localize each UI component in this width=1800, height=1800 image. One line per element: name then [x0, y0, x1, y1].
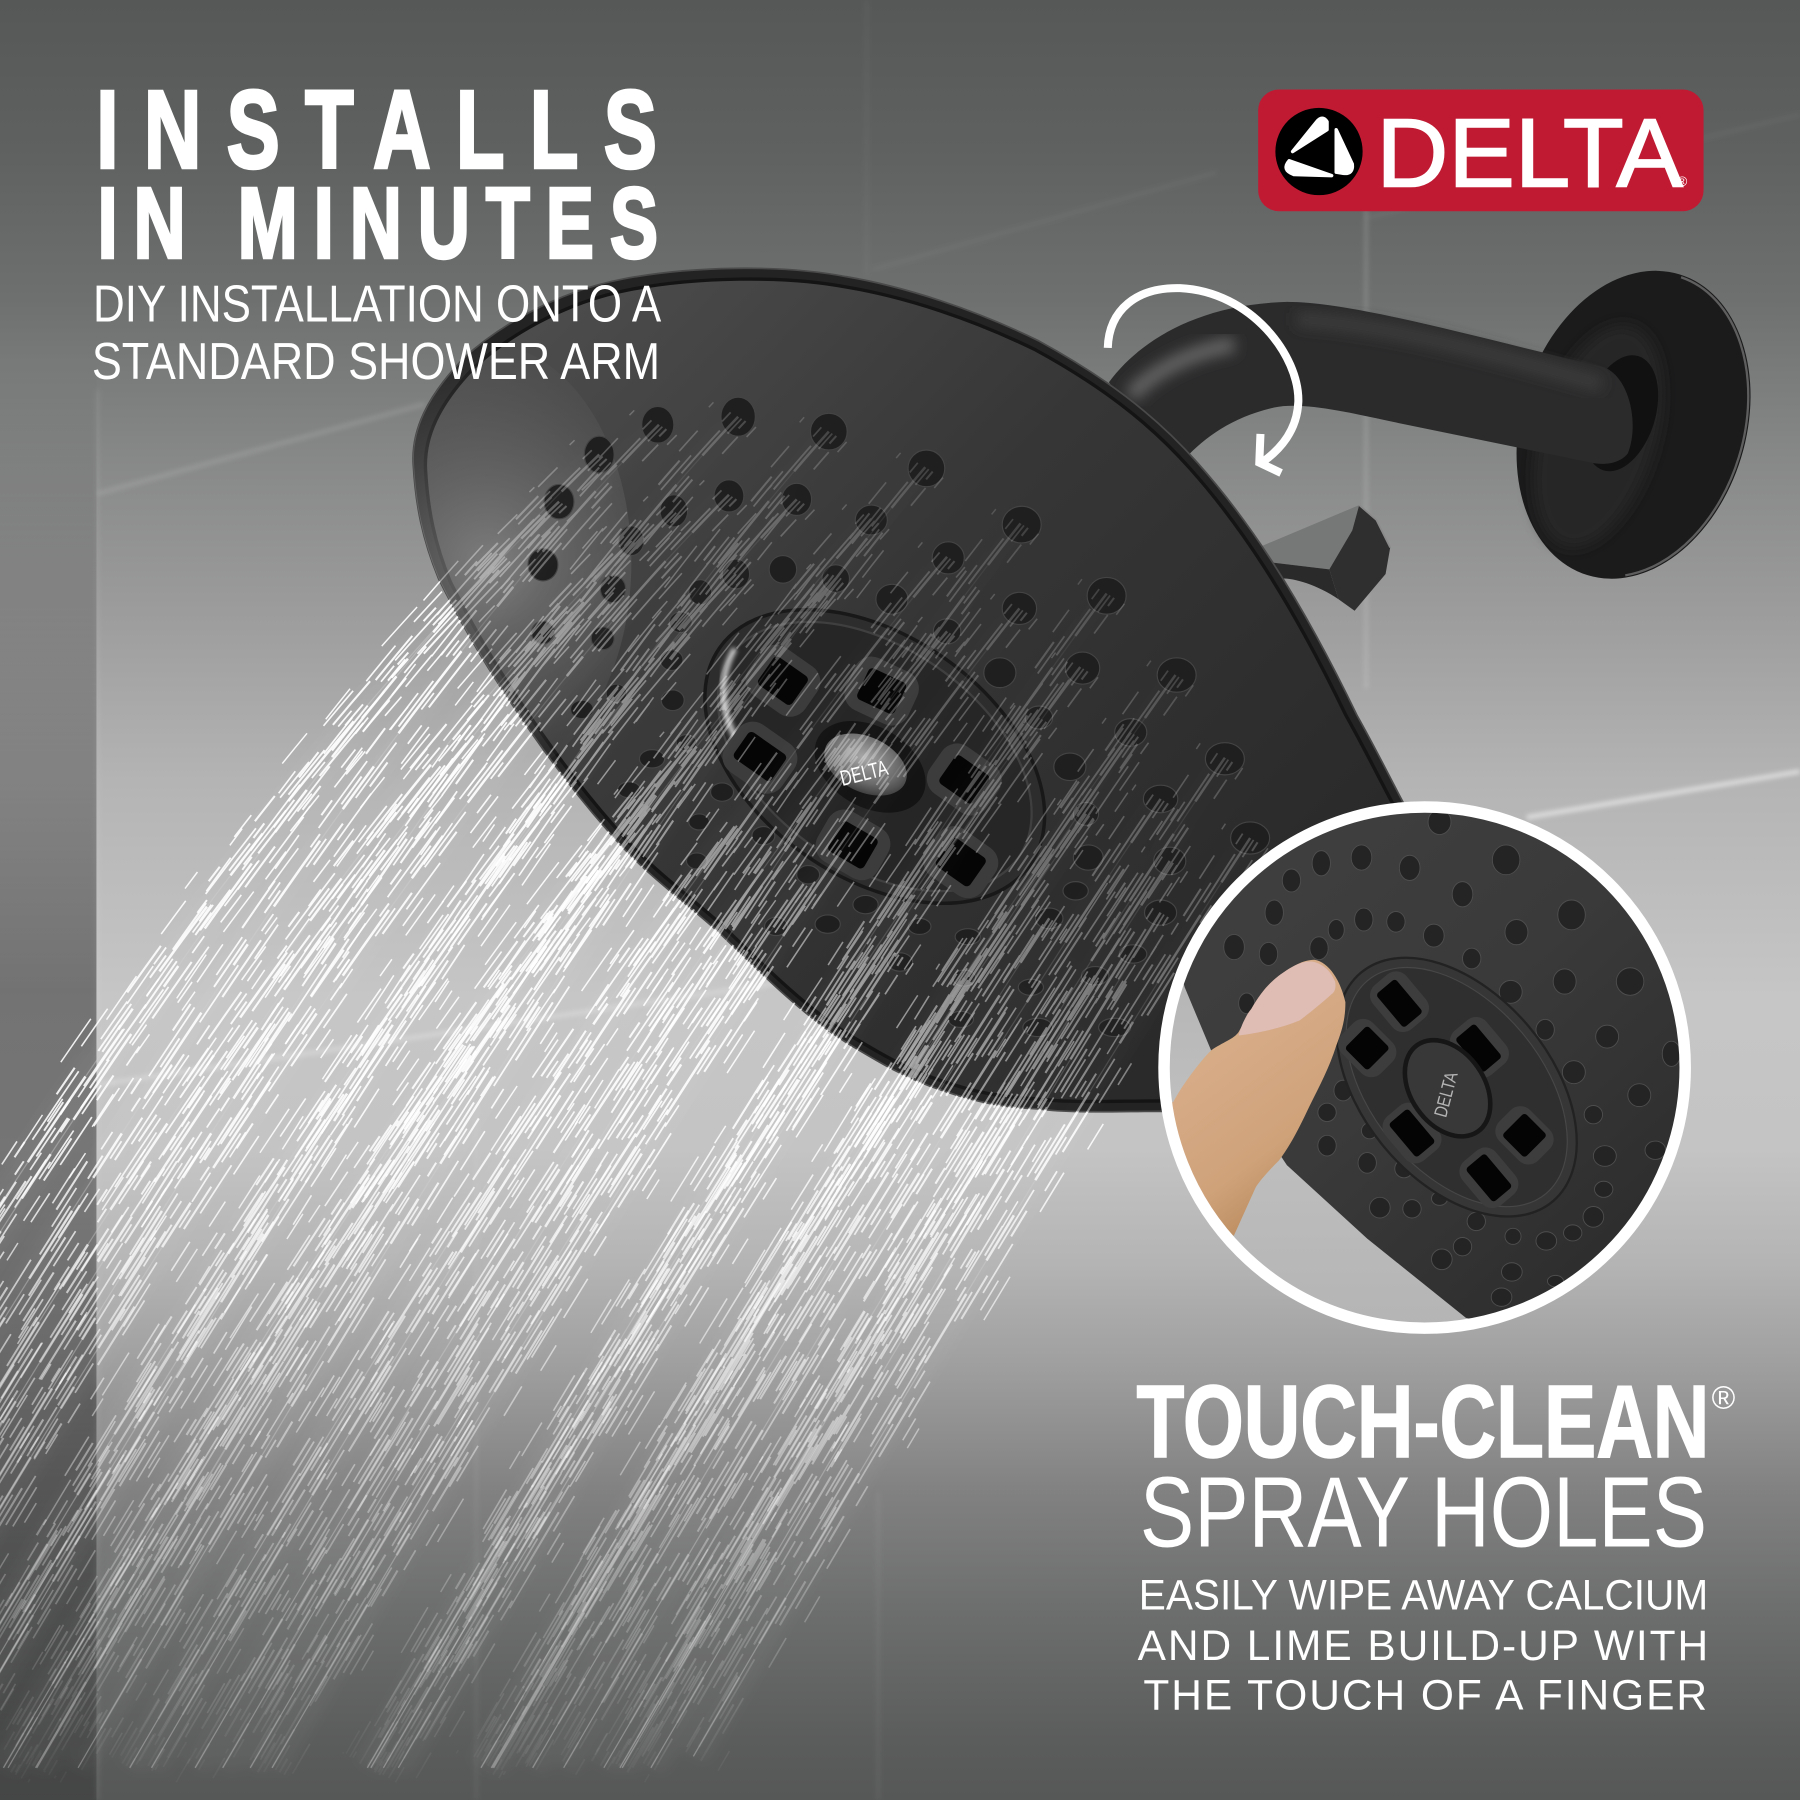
rotation arrow	[1108, 288, 1298, 473]
inset spray holes	[1224, 809, 1681, 1306]
brand logo: Delta: DELTA	[1376, 99, 1683, 208]
text block: DIY installation: STANDARD SHOWER ARM	[92, 332, 660, 390]
text block: touch-clean description	[1138, 1571, 1708, 1718]
inset logo text: DELTA	[1430, 1069, 1462, 1119]
shower head	[412, 267, 1404, 1113]
heading: installs in minutes: INSTALLS	[96, 69, 657, 192]
text block: touch-clean description: AND LIME BUILD-UP WITH	[1138, 1622, 1708, 1669]
spray selector lever	[1258, 505, 1390, 611]
shower arm	[1109, 302, 1633, 464]
finger	[1172, 960, 1346, 1236]
inset medallion with nozzles	[1336, 956, 1578, 1218]
spray holes: main face	[528, 397, 1270, 1037]
central spray medallion	[650, 549, 1099, 964]
text block: DIY installation: DIY INSTALLATION ONTO A	[93, 274, 662, 332]
medallion logo text: DELTA	[838, 755, 891, 791]
heading: installs in minutes: IN MINUTES	[98, 168, 658, 280]
brand logo: Delta	[1258, 90, 1704, 211]
wall flange	[1480, 241, 1787, 608]
heading: installs in minutes	[96, 69, 658, 280]
brand logo: Delta: ®	[1677, 174, 1687, 189]
heading: touch-clean spray holes	[1136, 1363, 1736, 1568]
text block: touch-clean description: EASILY WIPE AWAY CALCIUM	[1139, 1571, 1708, 1618]
text block: DIY installation	[92, 274, 662, 390]
inset callout: finger touching spray holes	[1158, 801, 1691, 1334]
heading: touch-clean spray holes: ®	[1712, 1380, 1736, 1416]
water spray	[0, 402, 1275, 1782]
text block: touch-clean description: THE TOUCH OF A FINGER	[1143, 1671, 1707, 1718]
